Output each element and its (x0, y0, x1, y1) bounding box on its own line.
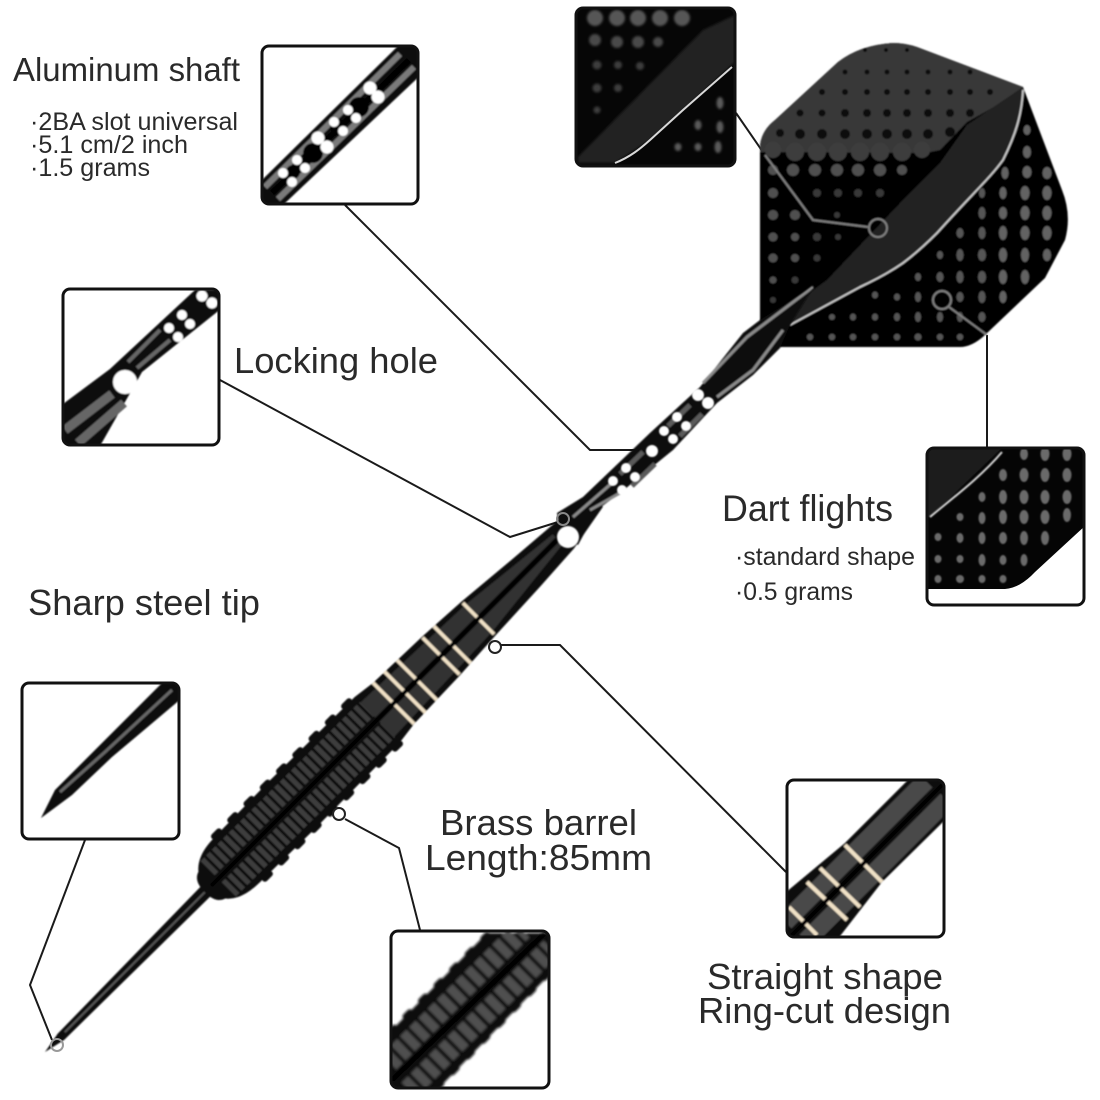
heading: ring cut design: Straight shape (707, 956, 943, 997)
barrel (181, 477, 620, 916)
text block: shaft specs (30, 108, 238, 182)
leader line: aluminum shaft (345, 205, 636, 450)
shaft (557, 285, 815, 545)
steel tip (40, 881, 216, 1057)
dart flight (755, 40, 1068, 347)
text block: flight specs: ·standard shape (735, 543, 915, 571)
inset: aluminum shaft (262, 46, 425, 205)
leader line: ring cut (500, 645, 786, 872)
central band (790, 87, 1023, 325)
leader line: steel tip (30, 840, 85, 1040)
leader line: brass barrel grip (345, 819, 420, 930)
barrel ribs (208, 709, 388, 889)
inset: locking hole (63, 289, 222, 446)
heading: brass barrel (425, 802, 652, 878)
text block: flight specs: ·0.5 grams (735, 578, 853, 606)
inset: flight right texture (925, 447, 1086, 608)
shaft rings (608, 389, 714, 495)
lower-right dots (999, 125, 1052, 303)
heading: brass barrel: Brass barrel (440, 802, 637, 843)
heading: sharp steel tip: Sharp steel tip (28, 582, 260, 623)
heading: ring cut design: Ring-cut design (698, 990, 951, 1031)
ring marker (489, 641, 501, 653)
text block: shaft specs: ·2BA slot universal (30, 108, 238, 136)
inset: flight top texture (576, 8, 735, 166)
barrel rear highlights (360, 522, 575, 737)
grip marker (333, 808, 345, 820)
locking hole (557, 526, 579, 548)
heading: ring cut design (698, 956, 951, 1031)
inset: steel tip (22, 683, 182, 839)
inset: brass barrel grip (388, 930, 552, 1090)
gold rings (373, 598, 499, 724)
heading: aluminum shaft: Aluminum shaft (13, 51, 240, 88)
lower-left dots (768, 164, 907, 284)
leader line: right flight inset (986, 335, 988, 447)
heading: locking hole: Locking hole (234, 340, 438, 381)
barrel knurling teeth (214, 696, 401, 883)
dart body (22, 285, 815, 1075)
tip marker (51, 1039, 63, 1051)
inset: ring cut (785, 778, 947, 941)
leader line: locking hole (220, 380, 558, 537)
text block: shaft specs: ·5.1 cm/2 inch (30, 131, 188, 159)
leader line: top flight inset (736, 113, 765, 155)
text block: shaft specs: ·1.5 grams (30, 154, 150, 182)
heading: brass barrel: Length:85mm (425, 837, 652, 878)
text block: flight specs (735, 543, 915, 606)
heading: dart flights: Dart flights (722, 488, 893, 529)
